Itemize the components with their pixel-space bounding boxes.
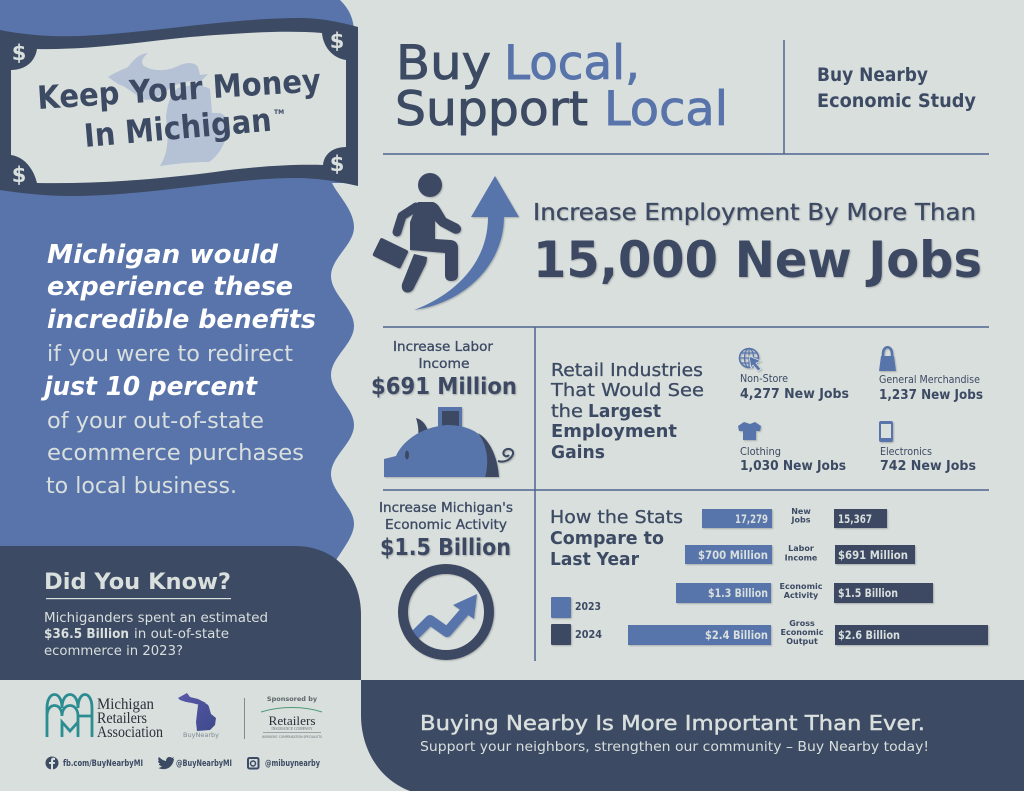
- comparison heading: How the Stats: [550, 507, 683, 528]
- social: twitter: @BuyNearbyMI: [176, 759, 232, 769]
- bar row: new jobs: [702, 507, 887, 528]
- bar row: gross economic output: Output: [786, 637, 818, 646]
- non-store stat: 4,277 New Jobs: [740, 386, 849, 402]
- text: increase employment: Increase Employment By More Than: [533, 200, 976, 226]
- bar row: economic activity: Activity: [784, 591, 819, 600]
- general merchandise stat: [879, 374, 983, 403]
- icon: growth chart in circle: [403, 569, 489, 655]
- logo: Buy Nearby: BuyNearby: [183, 731, 219, 739]
- social: facebook: fb.com/BuyNearbyMI: [63, 759, 143, 769]
- text block: benefits statement: if you were to redirect: [47, 341, 293, 367]
- panel background: [0, 546, 361, 680]
- general merchandise stat: General Merchandise: [879, 374, 980, 386]
- bill title line 2: In Michigan: [82, 101, 273, 155]
- comparison heading: Last Year: [550, 549, 639, 570]
- title: Local: [604, 82, 728, 137]
- bar row: gross economic output: $2.4 Billion: [705, 628, 768, 642]
- icon: piggy bank: [384, 407, 513, 477]
- social: facebook: [46, 756, 143, 770]
- panel: footer call to action: [361, 680, 1024, 791]
- bar row: new jobs: 15,367: [838, 512, 872, 526]
- non-store stat: Non-Store: [740, 373, 788, 385]
- did you know body: ecommerce in 2023?: [44, 644, 183, 659]
- text: 15,000 new jobs: 15,000 New Jobs: [533, 231, 982, 289]
- retail industries heading: Gains: [551, 442, 605, 463]
- dollar sign top right: $: [330, 29, 344, 53]
- footer subline: Support your neighbors, strengthen our community – Buy Nearby today!: [420, 740, 929, 755]
- panel: retail industries: [550, 347, 983, 474]
- text block: benefits statement: experience these: [47, 272, 293, 302]
- bar row: gross economic output: Economic: [780, 628, 824, 637]
- retail industries heading: [550, 360, 704, 463]
- bar row: new jobs: 17,279: [735, 512, 768, 526]
- logo: Retailers Insurance Company sponsor: INSURANCE COMPANY: [271, 727, 313, 731]
- dollar sign bottom right: $: [330, 152, 344, 176]
- social: instagram: [248, 758, 320, 769]
- non-store stat: [740, 373, 849, 402]
- comparison heading: [550, 507, 683, 570]
- general merchandise stat: 1,237 New Jobs: [879, 387, 983, 403]
- bill title line 1: Keep Your Money: [36, 61, 322, 117]
- logo: Retailers Insurance Company sponsor: [261, 695, 322, 739]
- text block: benefits statement: Michigan would: [47, 240, 278, 270]
- electronics stat: [880, 446, 976, 474]
- retail industries heading: Employment: [551, 421, 677, 442]
- panel: stats comparison: [550, 507, 988, 646]
- bar row: economic activity: Economic: [780, 582, 823, 591]
- dollar sign top left: $: [12, 41, 26, 65]
- title: Support: [395, 82, 588, 137]
- footer background: [361, 680, 1024, 791]
- economic activity value: $1.5 Billion: [380, 535, 511, 561]
- association name: Retailers: [97, 710, 147, 727]
- legend: 2024: [575, 629, 602, 641]
- subtitle: buy nearby economic study: Buy Nearby: [817, 64, 929, 86]
- text block: benefits statement: just 10 percent: [40, 372, 258, 402]
- bill frame: [0, 18, 358, 196]
- did you know body: Michiganders spent an estimated: [44, 611, 268, 626]
- bar row: economic activity: [676, 582, 933, 603]
- clothing stat: Clothing: [740, 446, 781, 458]
- person: [372, 173, 461, 293]
- retail industries heading: That Would See: [550, 380, 704, 401]
- labor income label: Increase Labor: [393, 340, 494, 355]
- logo: Retailers Insurance Company sponsor: WORKERS' COMPENSATION SPECIALISTS: [262, 735, 322, 739]
- did you know heading: Did You Know?: [44, 570, 231, 595]
- bar row: labor income: $691 Million: [838, 548, 908, 562]
- labor income label: [393, 340, 494, 372]
- icon: t-shirt: [738, 422, 761, 440]
- bar row: labor income: [685, 544, 915, 564]
- icon: smartphone: [879, 421, 893, 442]
- panel: dollar bill banner: [0, 18, 358, 196]
- social: instagram: @mibuynearby: [265, 759, 320, 769]
- icon: person climbing with rising arrow: [372, 173, 519, 310]
- logo: Retailers Insurance Company sponsor: Sponsored by: [267, 695, 318, 703]
- subtitle: buy nearby economic study: [817, 64, 977, 112]
- electronics stat: Electronics: [880, 446, 932, 458]
- trademark: TM: [274, 109, 284, 116]
- bar row: economic activity: $1.3 Billion: [708, 586, 768, 600]
- labor income value: $691 Million: [371, 374, 517, 400]
- association name: [97, 696, 163, 741]
- text block: benefits statement: [40, 240, 316, 499]
- panel: economic activity: [379, 501, 513, 655]
- subtitle: buy nearby economic study: Economic Study: [817, 90, 977, 112]
- did you know body: [44, 611, 268, 659]
- Michigan silhouette: [108, 53, 229, 166]
- MRA mark: [47, 694, 92, 737]
- bar row: gross economic output: $2.6 Billion: [838, 628, 900, 642]
- bar row: gross economic output: Gross: [789, 619, 815, 628]
- arrow: [414, 176, 519, 310]
- panel: blue wavy sidebar: [0, 0, 354, 600]
- text block: benefits statement: ecommerce purchases: [47, 440, 304, 466]
- retail industries heading: the: [551, 401, 583, 422]
- title: Buy: [396, 36, 491, 91]
- icon: globe and cursor: [740, 348, 761, 371]
- did you know body: in out-of-state: [134, 627, 229, 642]
- bill face: [11, 32, 346, 183]
- title: [395, 36, 728, 137]
- bar row: labor income: Income: [785, 554, 818, 562]
- dollar sign bottom left: $: [12, 163, 26, 187]
- social: twitter: [158, 757, 232, 769]
- bar row: labor income: Labor: [788, 544, 814, 553]
- clothing stat: [740, 446, 846, 474]
- bar row: new jobs: Jobs: [791, 516, 811, 524]
- legend: [551, 597, 602, 645]
- electronics stat: 742 New Jobs: [880, 458, 976, 474]
- panel: labor income: [371, 340, 517, 477]
- logo: Buy Nearby: [178, 693, 219, 739]
- bar row: labor income: $700 Million: [698, 548, 768, 562]
- text block: benefits statement: of your out-of-state: [47, 408, 264, 434]
- association name: Michigan: [97, 696, 154, 713]
- bar row: gross economic output: [628, 619, 988, 646]
- comparison heading: Compare to: [550, 528, 664, 549]
- text block: benefits statement: to local business.: [46, 473, 237, 499]
- icon: shopping bag: [879, 347, 896, 371]
- economic activity label: [379, 501, 513, 533]
- text block: benefits statement: incredible benefits: [47, 305, 316, 335]
- bar row: economic activity: $1.5 Billion: [838, 586, 898, 600]
- did you know body: $36.5 Billion: [44, 627, 129, 642]
- economic activity label: Increase Michigan's: [379, 501, 513, 516]
- bar row: new jobs: New: [791, 507, 811, 516]
- labor income label: Income: [418, 357, 470, 372]
- logo: Michigan Retailers Association: [47, 694, 163, 741]
- retail industries heading: Retail Industries: [551, 360, 703, 381]
- association name: Association: [97, 724, 163, 741]
- economic activity label: Economic Activity: [385, 518, 507, 533]
- clothing stat: 1,030 New Jobs: [740, 458, 846, 474]
- panel: did you know: [0, 546, 361, 680]
- retail industries heading: Largest: [588, 401, 661, 422]
- logo: Retailers Insurance Company sponsor: Retailers: [268, 714, 316, 728]
- footer headline: Buying Nearby Is More Important Than Ever.: [420, 711, 925, 735]
- title: Local,: [504, 36, 640, 91]
- legend: 2023: [575, 601, 601, 613]
